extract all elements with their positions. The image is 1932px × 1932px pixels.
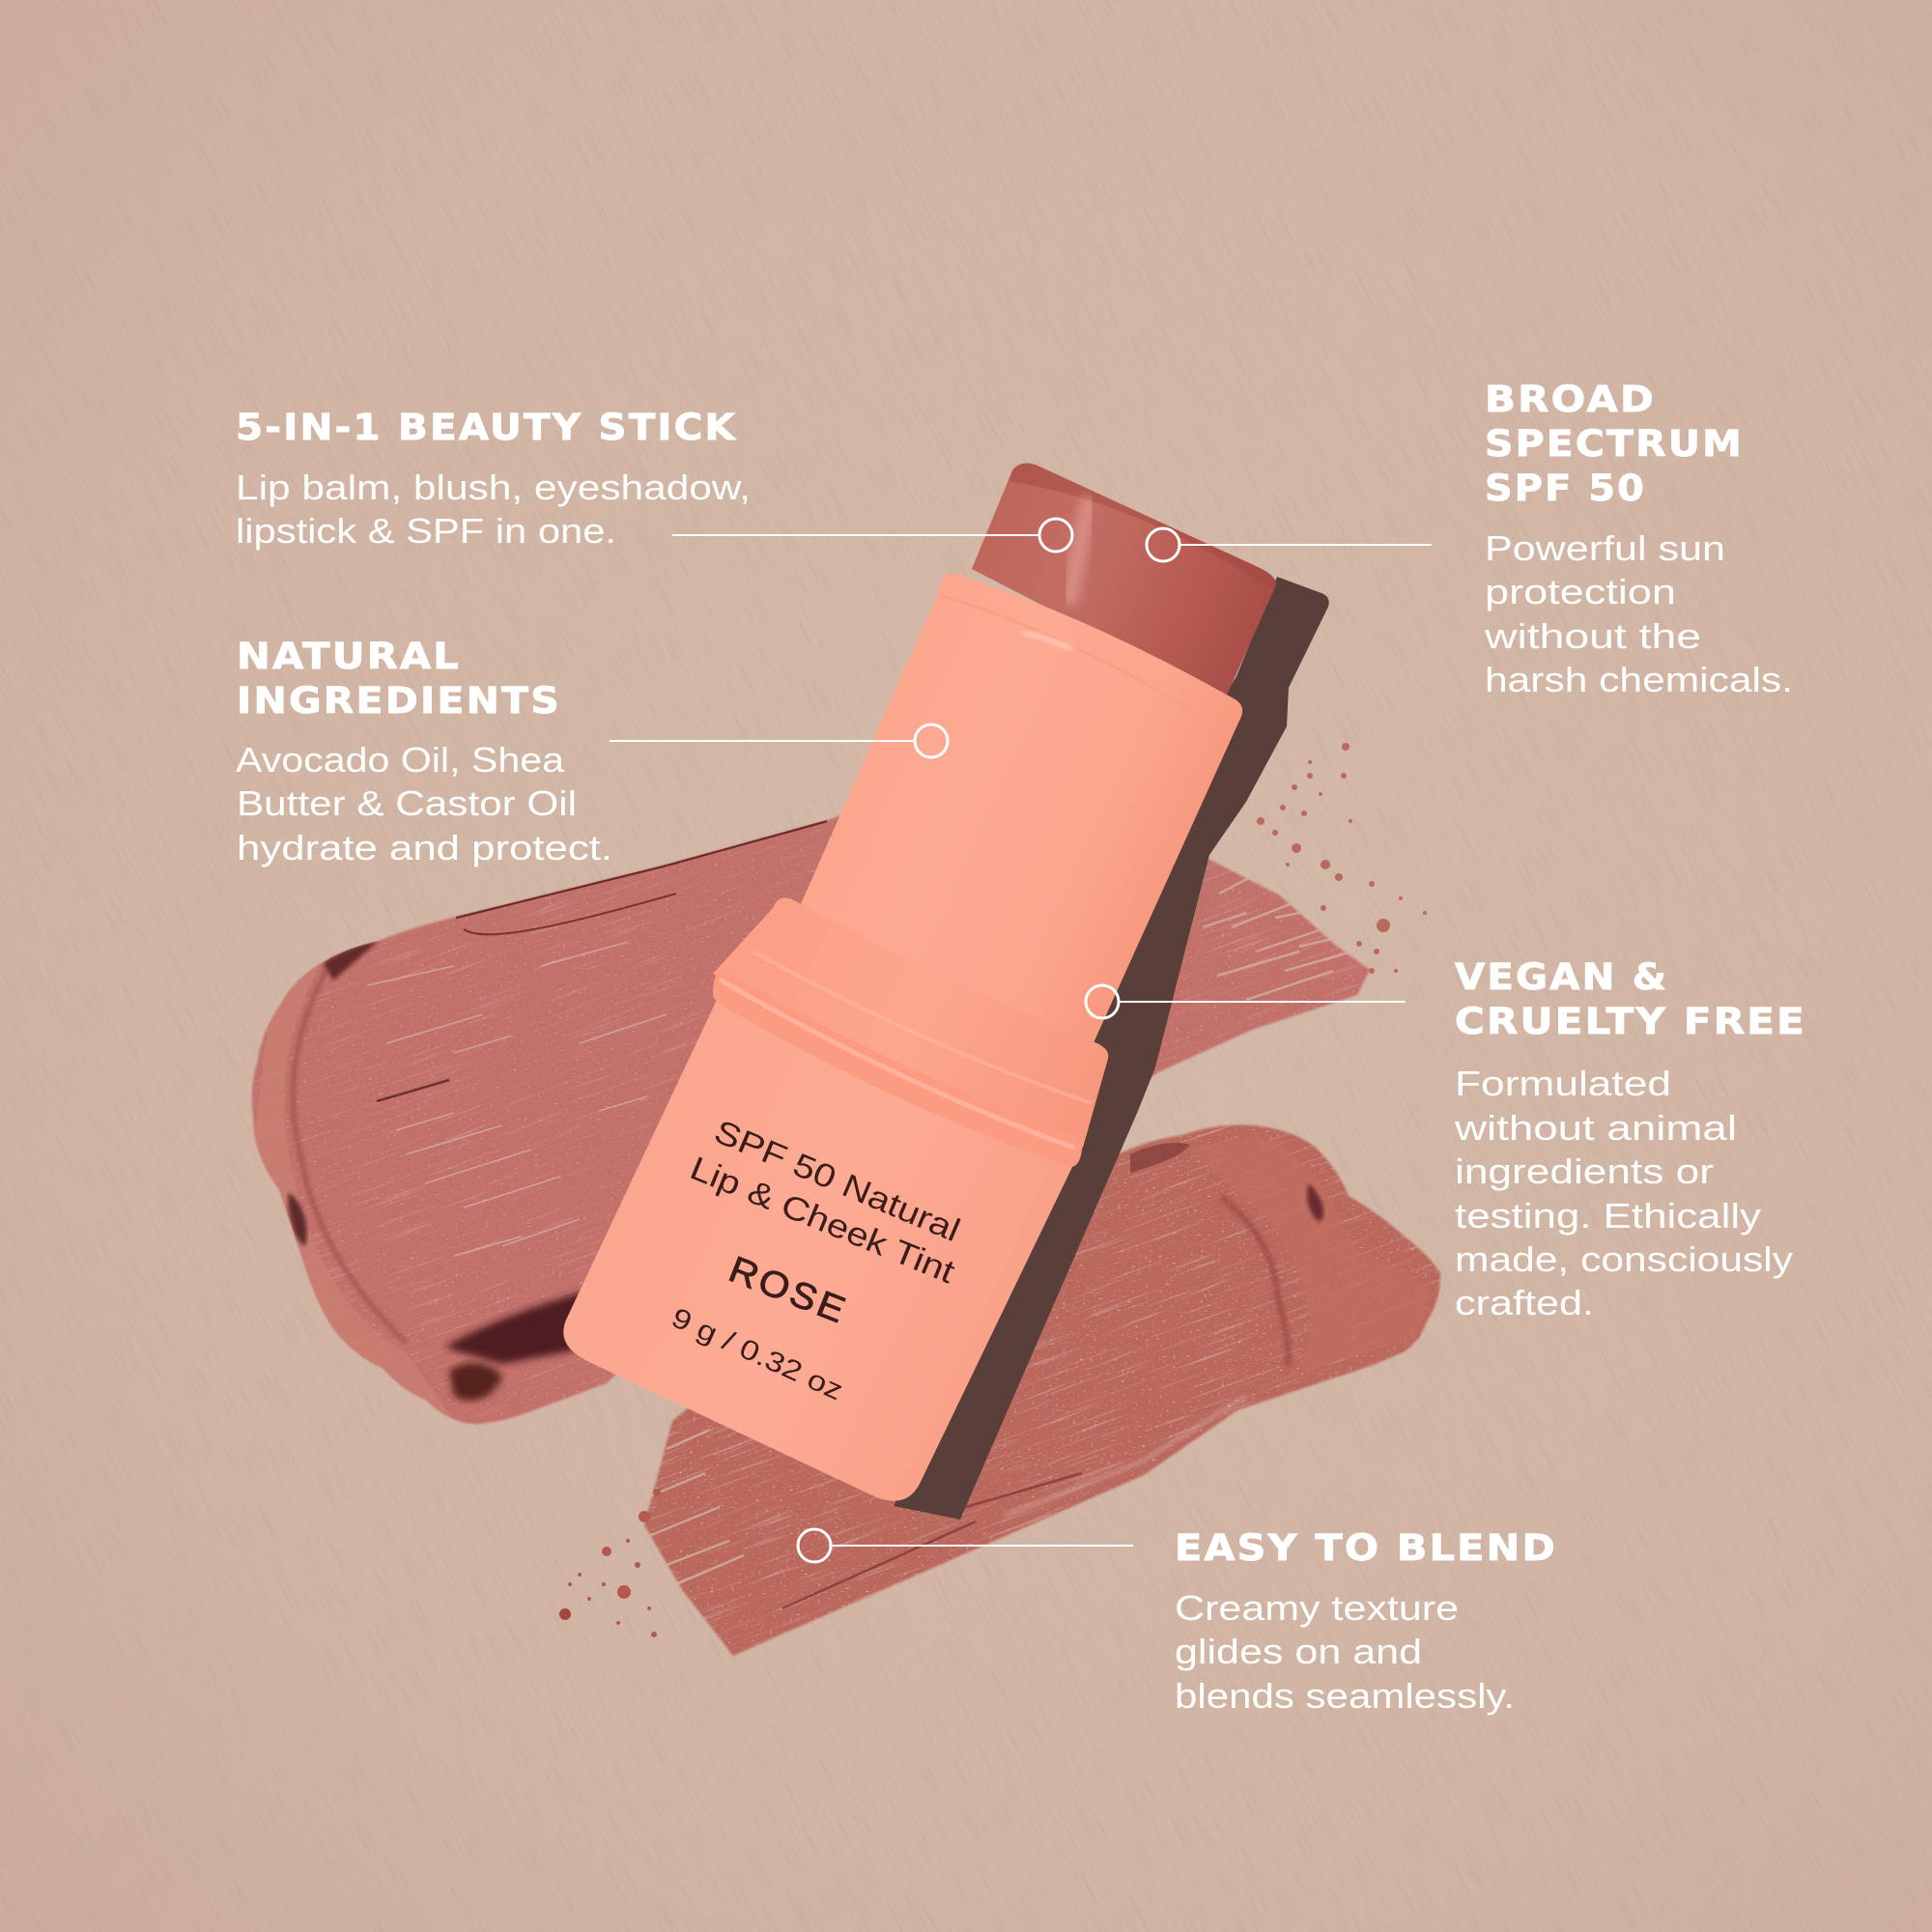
text block: broad spectrum SPF 50: SPECTRUM	[1485, 423, 1744, 465]
text block: broad spectrum SPF 50: protection	[1485, 572, 1676, 611]
cast shadow of the stick	[894, 577, 1329, 1520]
text block: broad spectrum SPF 50	[1484, 379, 1793, 699]
collar	[713, 897, 1108, 1148]
text block: 5-in-1 beauty stick	[236, 407, 751, 551]
text block: broad spectrum SPF 50: BROAD	[1485, 379, 1656, 420]
label: product name: SPF 50 Natural	[709, 1113, 965, 1249]
label: product name	[667, 1113, 965, 1406]
label: product name: Lip & Cheek Tint	[685, 1150, 960, 1291]
text block: natural ingredients: hydrate and protect.	[237, 828, 612, 867]
text block: vegan and cruelty free	[1454, 956, 1806, 1322]
upper tube	[797, 573, 1242, 1058]
text block: 5-in-1 beauty stick: lipstick & SPF in one.	[236, 511, 616, 551]
product: stick	[563, 463, 1276, 1501]
colour swatch: upper-left smear	[242, 773, 1381, 1430]
colour swatch: lower-right smear	[638, 1121, 1449, 1662]
callout: broad spectrum pointer	[1147, 528, 1432, 561]
text block: vegan and cruelty free: testing. Ethically	[1455, 1196, 1761, 1236]
text block: broad spectrum SPF 50: harsh chemicals.	[1485, 660, 1793, 699]
text block: easy to blend: glides on and	[1175, 1632, 1422, 1671]
text block: easy to blend: Creamy texture	[1175, 1588, 1459, 1628]
base ridge	[713, 968, 1084, 1167]
feathered brush tips	[1203, 869, 1352, 1000]
text block: easy to blend: blends seamlessly.	[1175, 1676, 1515, 1716]
text block: vegan and cruelty free: made, consciously	[1455, 1239, 1793, 1279]
paint splatter, lower left	[559, 1489, 661, 1637]
text block: vegan and cruelty free: CRUELTY FREE	[1455, 1001, 1806, 1042]
text block: vegan and cruelty free: crafted.	[1455, 1283, 1594, 1322]
text block: vegan and cruelty free: without animal	[1454, 1108, 1737, 1148]
bullet: tinted balm	[972, 463, 1276, 699]
text block: natural ingredients: Butter & Castor Oil	[237, 783, 577, 823]
callout: vegan pointer	[1086, 985, 1406, 1018]
text block: vegan and cruelty free: ingredients or	[1455, 1151, 1714, 1191]
label: product name: 9 g / 0.32 oz	[667, 1302, 847, 1406]
text block: 5-in-1 beauty stick: Lip balm, blush, eyeshadow,	[236, 468, 751, 507]
text block: broad spectrum SPF 50: SPF 50	[1485, 468, 1646, 509]
text block: 5-in-1 beauty stick: 5-IN-1 BEAUTY STICK	[236, 407, 737, 448]
callout: easy to blend pointer	[798, 1529, 1133, 1562]
text block: natural ingredients: NATURAL	[237, 636, 461, 677]
text block: natural ingredients: INGREDIENTS	[237, 680, 561, 722]
text block: natural ingredients	[236, 636, 612, 867]
text block: easy to blend	[1175, 1527, 1557, 1716]
text block: broad spectrum SPF 50: without the	[1484, 616, 1701, 656]
text block: vegan and cruelty free: Formulated	[1455, 1064, 1671, 1103]
paint splatter, upper right	[1254, 743, 1427, 974]
text block: broad spectrum SPF 50: Powerful sun	[1485, 528, 1725, 568]
label: product name: ROSE	[724, 1249, 853, 1332]
text block: natural ingredients: Avocado Oil, Shea	[236, 740, 565, 780]
text block: easy to blend: EASY TO BLEND	[1175, 1527, 1557, 1569]
lower base	[563, 1000, 1074, 1501]
text block: vegan and cruelty free: VEGAN &	[1455, 956, 1668, 998]
callout: 5-in-1 beauty stick pointer	[672, 519, 1072, 552]
callout: natural ingredients pointer	[610, 724, 948, 757]
